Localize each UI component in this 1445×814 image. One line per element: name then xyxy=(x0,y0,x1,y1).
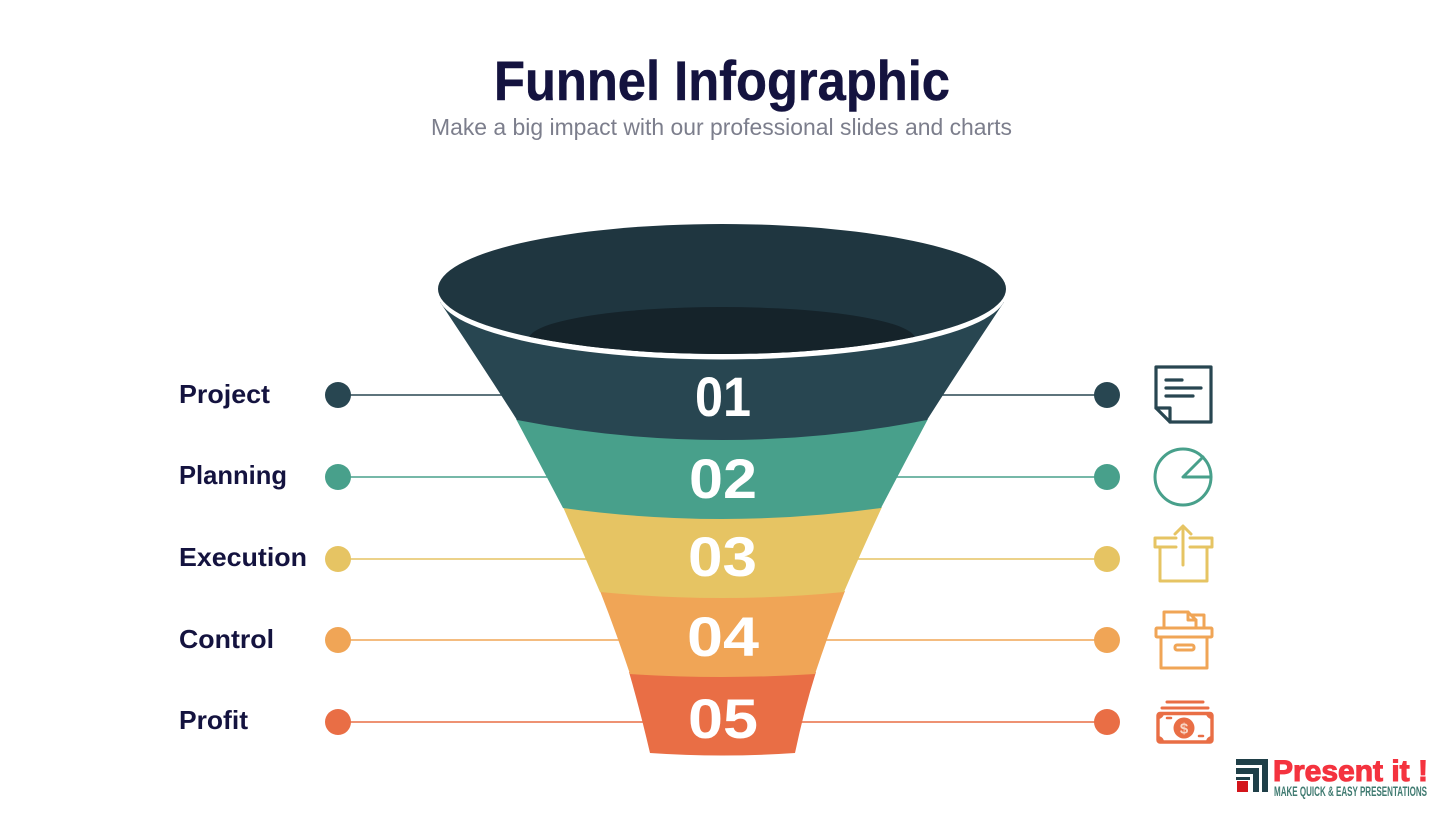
row 4: Control connector xyxy=(325,627,1120,653)
icon: note xyxy=(1156,367,1211,422)
icon: money: $ xyxy=(1180,720,1189,738)
funnel segment 2 xyxy=(516,419,928,519)
funnel segment 3 xyxy=(563,507,882,598)
label: Execution: Execution xyxy=(179,542,307,572)
funnel mouth xyxy=(438,224,1006,354)
label: Control: Control xyxy=(179,624,274,654)
funnel segment 5 xyxy=(629,672,816,756)
label: Planning: Planning xyxy=(179,460,287,490)
funnel xyxy=(438,224,1006,756)
logo mark xyxy=(1236,759,1268,792)
row 2: Planning connector xyxy=(325,464,1120,490)
funnel white rim xyxy=(438,228,1006,360)
number 04: 04 xyxy=(687,605,759,668)
funnel segment 1 xyxy=(440,302,1004,440)
row 3: Execution connector xyxy=(325,546,1120,572)
funnel inner shadow xyxy=(530,307,914,354)
row 5: Profit connector xyxy=(325,709,1120,735)
icon: pie chart xyxy=(1155,449,1211,505)
number 01: 01 xyxy=(695,365,751,428)
icon: money xyxy=(1158,702,1212,742)
number 02: 02 xyxy=(689,447,757,510)
icon: archive box xyxy=(1156,612,1212,668)
logo xyxy=(1236,755,1428,799)
funnel segment 4 xyxy=(600,591,845,677)
icon: box with up arrow xyxy=(1155,526,1212,581)
title: Funnel Infographic xyxy=(494,49,950,112)
number 05: 05 xyxy=(688,687,758,750)
row 1: Project connector xyxy=(325,382,1120,408)
subtitle: Make a big impact with our professional slides and charts xyxy=(431,114,1012,140)
logo wordmark: Present it ! xyxy=(1273,755,1428,788)
label: Project: Project xyxy=(179,379,270,409)
label: Profit: Profit xyxy=(179,705,248,735)
number 03: 03 xyxy=(688,525,757,588)
